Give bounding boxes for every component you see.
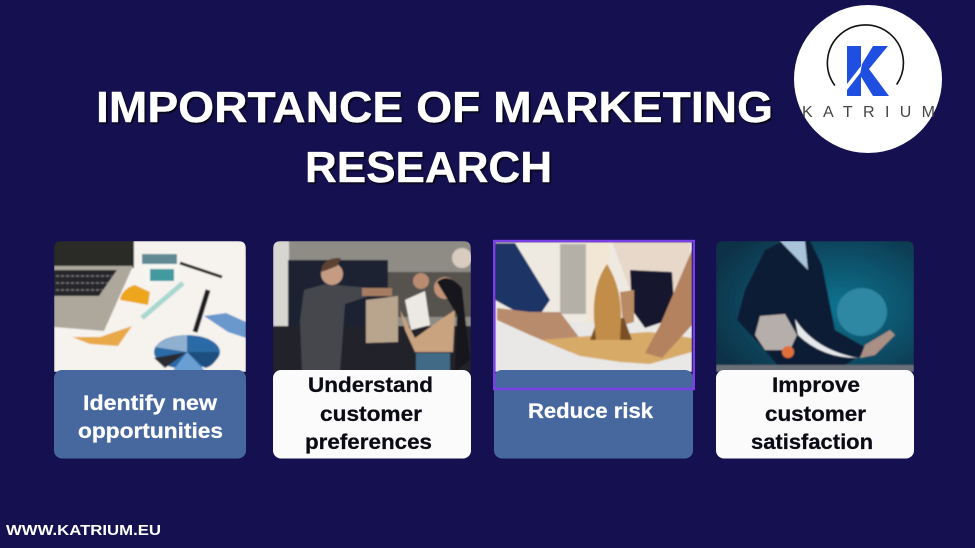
logo wordmark: KATRIUM	[802, 104, 935, 121]
panel: identify new opportunities	[54, 241, 246, 458]
label box	[54, 370, 246, 458]
label text: customer	[765, 403, 866, 426]
label box	[273, 370, 471, 458]
label text: Understand	[308, 374, 433, 397]
panel: improve customer satisfaction	[716, 241, 914, 458]
photo: shop assistant and customers	[273, 241, 472, 372]
label text: opportunities	[78, 420, 223, 443]
label text	[751, 374, 873, 454]
label text	[305, 374, 433, 454]
label text: Improve	[772, 374, 860, 397]
photo: desk with laptop and charts	[54, 241, 246, 372]
photo: businessman with rising arrow	[716, 241, 914, 372]
label text: satisfaction	[751, 431, 873, 454]
label text: Identify new	[83, 392, 218, 415]
label box	[494, 370, 693, 458]
panel: understand customer preferences	[273, 241, 472, 458]
footer url: WWW.KATRIUM.EU	[6, 522, 161, 539]
label box	[716, 370, 914, 458]
label text: customer	[320, 403, 422, 426]
title: IMPORTANCE OF MARKETING	[96, 83, 773, 132]
panel: reduce risk	[494, 241, 694, 458]
label text: preferences	[305, 431, 432, 454]
icon: logo arc	[827, 25, 903, 85]
label text: Reduce risk	[528, 400, 653, 423]
photo: hands around wooden rocket	[495, 242, 692, 372]
label text	[78, 392, 223, 443]
selection frame	[494, 241, 694, 389]
title: RESEARCH	[305, 143, 552, 192]
icon: logo letter K	[847, 46, 889, 96]
logo	[794, 5, 942, 153]
title	[96, 83, 773, 192]
